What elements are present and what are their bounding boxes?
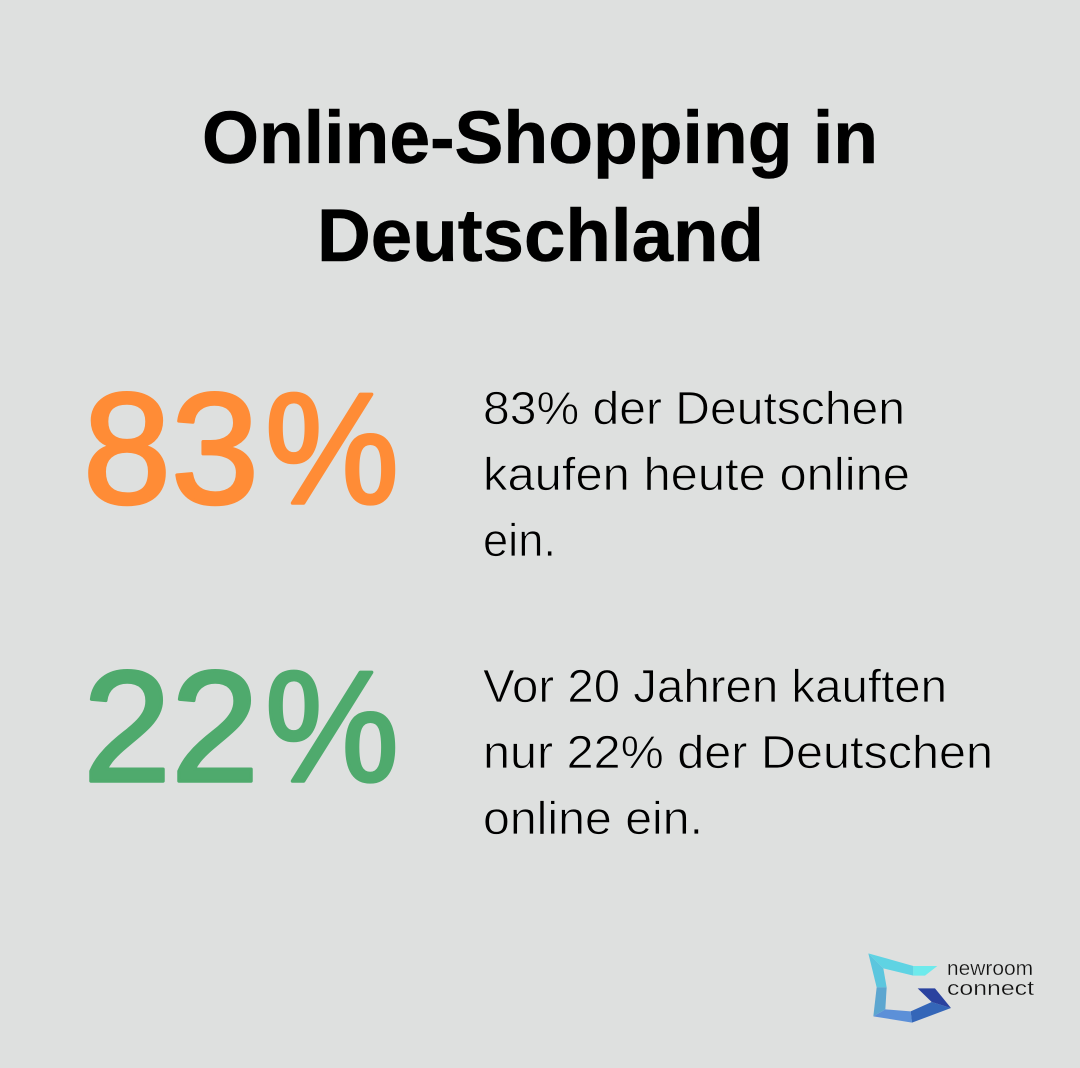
- big number: 83%: %: [265, 361, 399, 537]
- title: Deutschland: [317, 194, 764, 277]
- logo text: [947, 958, 1035, 1000]
- title: [202, 96, 878, 277]
- description: 83%: ein.: [483, 514, 556, 566]
- description: 83%: kaufen heute online: [483, 448, 910, 500]
- big number: 83%: [83, 361, 399, 537]
- description: 22%: [483, 660, 993, 844]
- big number: 83%: 83: [83, 361, 259, 537]
- statistic: 22% online shoppers 20 years ago: [83, 639, 993, 844]
- description: 22%: nur 22% der Deutschen: [483, 726, 993, 778]
- description: 83%: [483, 382, 910, 566]
- logo text: connect: [947, 978, 1035, 1000]
- big number: 22%: 22: [83, 639, 259, 815]
- big number: 22%: [83, 639, 399, 815]
- description: 83%: 83% der Deutschen: [483, 382, 905, 434]
- description: 22%: online ein.: [483, 792, 703, 844]
- logo text: newroom: [947, 958, 1033, 980]
- title: Online-Shopping in: [202, 96, 878, 179]
- statistic: 83% online shoppers today: [83, 361, 910, 566]
- description: 22%: Vor 20 Jahren kauften: [483, 660, 947, 712]
- icon: logo mark: [868, 953, 951, 1023]
- logo: newroom connect: [868, 953, 1035, 1023]
- big number: 22%: %: [265, 639, 399, 815]
